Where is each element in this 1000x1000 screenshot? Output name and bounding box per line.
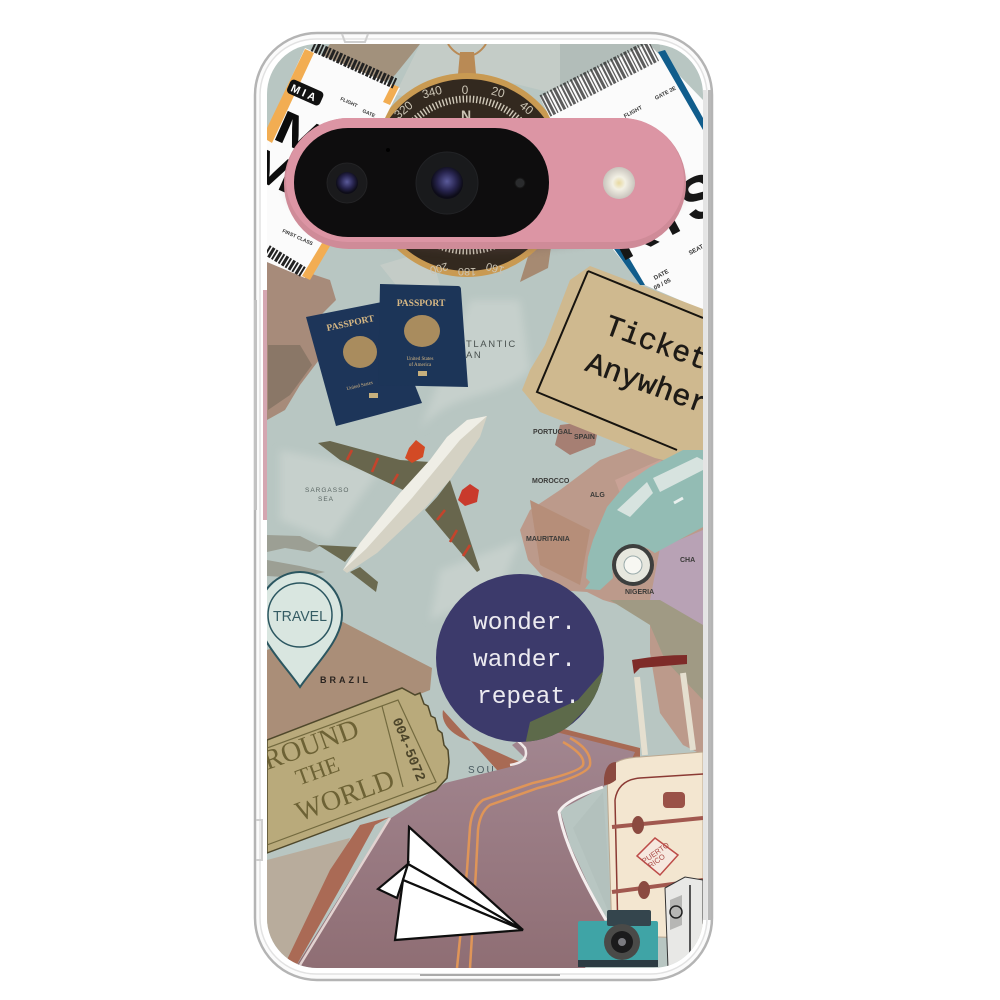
map: South America — [267, 622, 432, 968]
compass: N — [461, 107, 471, 123]
boarding pass: right: DATE — [653, 269, 670, 282]
map labels: CHA — [680, 557, 695, 564]
location pin: travel — [258, 572, 342, 687]
map labels: TLANTIC — [466, 339, 517, 350]
boarding pass: right: SEAT 14B — [688, 238, 716, 257]
map: Africa and Europe — [520, 420, 703, 755]
map labels: NIGERIA — [625, 589, 654, 596]
boarding pass: right — [540, 44, 703, 309]
boarding pass: right: KTS — [597, 158, 734, 273]
compass: 340 — [420, 83, 444, 101]
badge: wonder wander repeat — [436, 574, 604, 745]
map labels: SOU — [468, 765, 496, 776]
sticker: Puerto Rico: RICO — [646, 852, 667, 870]
case bumpers — [256, 34, 560, 975]
map labels: MOROCCO — [532, 478, 570, 485]
passport: front — [378, 284, 468, 387]
winding road — [283, 710, 640, 968]
map labels: SARGASSO — [305, 487, 349, 494]
map labels: AN — [466, 350, 482, 361]
map: light ocean swirl — [280, 300, 530, 620]
boarding pass: left: FIRST CLASS — [281, 228, 314, 247]
ticket: anywhere: Ticket — [600, 310, 712, 379]
boarding pass: right: FLIGHT — [623, 105, 644, 120]
boarding pass: left — [267, 44, 400, 280]
ticket: anywhere — [522, 266, 712, 470]
passport: front: United States — [407, 357, 433, 362]
map labels: ALG — [590, 492, 605, 499]
boarding pass: right: GATE 2E — [654, 85, 678, 102]
ticket: round the world — [259, 688, 449, 853]
sticker: Puerto Rico — [637, 838, 678, 875]
paper plane — [378, 827, 523, 940]
compass: 200 — [428, 260, 449, 276]
badge: wonder wander repeat: repeat. — [477, 684, 580, 711]
map labels: SEA — [318, 496, 334, 503]
rear lens: main — [416, 152, 478, 214]
ticket label: MIA: MIA — [289, 82, 320, 105]
teal camera — [578, 910, 658, 967]
location pin: travel: TRAVEL — [273, 608, 327, 625]
ticket: round the world: ROUND — [259, 713, 363, 777]
vintage car — [585, 450, 703, 590]
sticker: Puerto Rico: PUERTO — [640, 840, 671, 866]
map labels: MAURITANIA — [526, 536, 570, 543]
map: North America — [267, 262, 336, 420]
passport: rear: United States — [346, 381, 374, 392]
flash — [603, 167, 635, 199]
map labels: BRAZIL — [320, 675, 371, 685]
road lines — [300, 818, 390, 965]
compass: 20 — [490, 84, 507, 101]
compass: 40 — [517, 98, 536, 118]
large departure code: M — [267, 100, 336, 168]
badge: wonder wander repeat: wander. — [473, 647, 576, 674]
sketched backpack — [665, 877, 703, 968]
large departure code: M — [238, 135, 307, 204]
compass — [385, 44, 550, 277]
collage artwork — [267, 44, 703, 968]
map ocean background — [267, 44, 703, 968]
map labels: SPAIN — [574, 434, 595, 441]
compass: 180 — [458, 265, 476, 277]
map labels: PORTUGAL — [533, 429, 573, 436]
boarding pass: right: 09 / 05 — [653, 278, 673, 292]
jet engines — [405, 440, 425, 463]
passport: front: PASSPORT — [397, 299, 446, 309]
large departure code — [267, 110, 320, 192]
passport: front: of America — [409, 363, 432, 368]
airplane — [318, 416, 487, 592]
map: northern lands — [318, 44, 660, 290]
passport: rear: PASSPORT — [326, 314, 376, 334]
camera bar — [284, 118, 686, 252]
ticket: round the world: THE — [292, 752, 343, 790]
passport: rear — [306, 302, 422, 426]
compass: 160 — [485, 260, 506, 276]
camera window — [294, 128, 549, 237]
map: Caribbean islands — [267, 535, 325, 578]
compass: 320 — [391, 98, 416, 122]
phone case frame — [254, 33, 712, 980]
map labels — [305, 339, 695, 776]
ticket: anywhere: Anywher — [581, 347, 712, 423]
rear lens: ultrawide — [327, 163, 367, 203]
badge: wonder wander repeat: wonder. — [473, 610, 576, 637]
ticket: round the world: WORLD — [292, 764, 399, 828]
microphone dot — [386, 148, 390, 152]
car wheel — [612, 544, 654, 586]
suitcase — [604, 655, 703, 938]
boarding pass: left: GATE — [361, 108, 377, 120]
compass: 0 — [462, 83, 469, 97]
sensor dot — [515, 178, 525, 188]
ticket: round the world: 004-5072 — [388, 716, 428, 784]
boarding pass: left: FLIGHT — [339, 96, 358, 109]
